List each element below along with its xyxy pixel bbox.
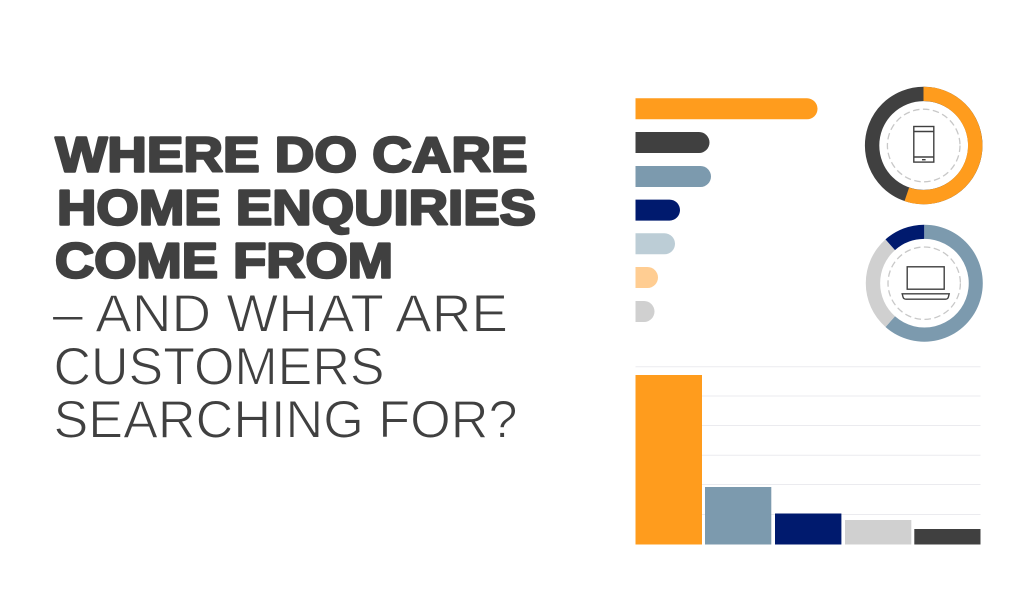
column: dark grey (914, 529, 980, 544)
donut segment: light grey (866, 239, 895, 327)
heading: bold lines (55, 128, 536, 288)
horizontal bar chart (636, 98, 818, 322)
icon: smartphone (914, 126, 934, 162)
bar: light grey (636, 301, 654, 322)
grid lines (636, 367, 980, 514)
title (52, 128, 536, 449)
bar: steel blue (636, 166, 711, 187)
heading: light lines: CUSTOMERS (54, 337, 384, 396)
heading: bold lines: COME FROM (55, 234, 393, 288)
bar: pale orange (636, 267, 658, 288)
heading: light lines (52, 284, 518, 449)
heading: bold lines: WHERE DO CARE (56, 128, 528, 182)
heading: light lines: – AND WHAT ARE (52, 284, 508, 344)
icon: laptop (902, 267, 949, 299)
column chart (636, 367, 980, 544)
column: navy (775, 514, 841, 544)
donut chart: desktop (866, 225, 983, 342)
bar: dark grey (636, 132, 710, 153)
donut segment: steel blue (886, 225, 983, 342)
column: light grey (845, 520, 911, 544)
bar: pale blue (636, 233, 675, 254)
donut segment: navy (886, 225, 924, 250)
bar: navy (636, 200, 680, 221)
bar: orange (636, 98, 818, 119)
heading: bold lines: HOME ENQUIRIES (57, 181, 536, 236)
donut chart: mobile (872, 87, 982, 204)
column: orange (636, 375, 702, 544)
donut segment: orange (904, 87, 982, 204)
heading: light lines: SEARCHING FOR? (54, 390, 518, 449)
column: steel blue (705, 487, 771, 544)
